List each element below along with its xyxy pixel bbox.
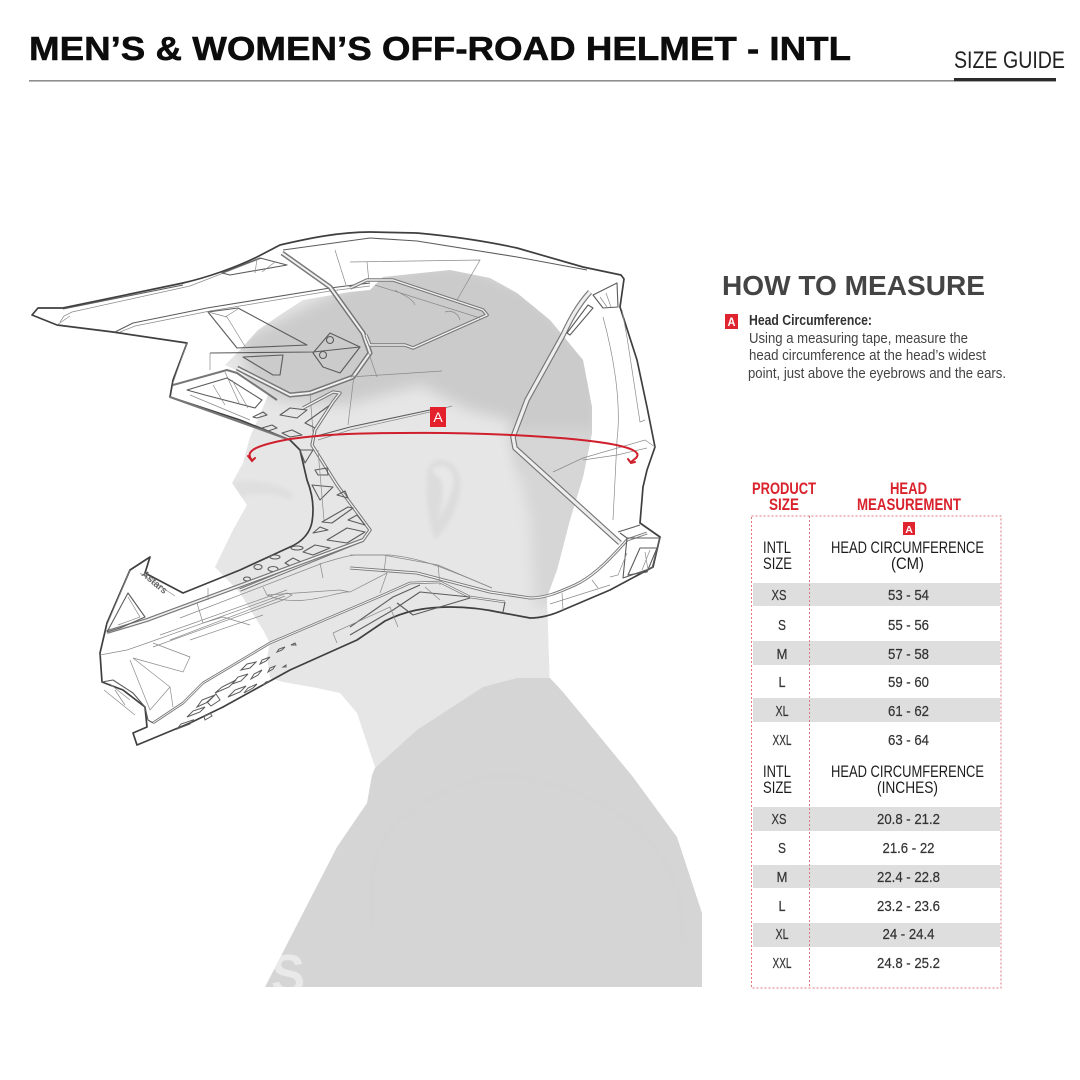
measuring instructions: Head Circumference:: [749, 313, 872, 329]
centimetre sizes: XXL: [772, 732, 792, 749]
centimetre sizes: S: [778, 617, 786, 634]
inches header: INTL: [763, 762, 791, 781]
helmet outer outline: [32, 232, 660, 745]
inch sizes: 20.8 - 21.2: [877, 811, 940, 828]
centimetre sizes: L: [778, 674, 786, 691]
chin vent holes: [177, 643, 296, 729]
table column headers: MEASUREMENT: [857, 495, 961, 514]
centimetre sizes: XS: [772, 587, 786, 604]
table row bands: [753, 583, 1000, 947]
inches header: (INCHES): [877, 778, 938, 797]
inch sizes: 24.8 - 25.2: [877, 955, 940, 972]
centimetre sizes: 55 - 56: [888, 617, 929, 634]
measuring instructions: head circumference at the head’s widest: [749, 348, 986, 364]
centimetre sizes: 53 - 54: [888, 587, 929, 604]
main spine: [237, 253, 370, 395]
helmet line drawing: [32, 232, 660, 745]
header rule: [29, 78, 1056, 82]
ear: [427, 460, 460, 540]
logo on chin: Astars: [139, 569, 169, 597]
rear details: [313, 283, 660, 610]
inches header: HEAD CIRCUMFERENCE: [831, 762, 984, 781]
centimetres header: SIZE: [763, 554, 792, 573]
inch sizes: 24 - 24.4: [882, 926, 934, 943]
rear arc band: [513, 292, 620, 543]
chin lower band: [102, 570, 505, 723]
title: MEN’S & WOMEN’S OFF-ROAD HELMET - INTL: [29, 30, 851, 67]
size table: [752, 479, 1001, 988]
measuring instructions: Using a measuring tape, measure the: [749, 331, 968, 347]
nose vent and lattice: [170, 370, 370, 590]
visor-side panels: [173, 308, 360, 432]
table column headers: SIZE: [769, 495, 799, 514]
inch sizes: L: [778, 898, 786, 915]
measuring instructions: point, just above the eyebrows and the ears.: [748, 366, 1006, 382]
centimetre sizes: 61 - 62: [888, 703, 929, 720]
marker A in table: [903, 522, 915, 536]
table column headers: PRODUCT: [752, 479, 816, 498]
chin strap band: [100, 533, 647, 710]
inch sizes: XL: [776, 926, 788, 943]
centimetre sizes: XL: [776, 703, 788, 720]
how to measure heading: HOW TO MEASURE: [722, 270, 985, 301]
inch sizes: [772, 811, 940, 972]
neck and face: [215, 270, 592, 790]
centimetre sizes: 63 - 64: [888, 732, 929, 749]
inch sizes: 21.6 - 22: [882, 840, 934, 857]
marker A on head: A: [433, 409, 443, 425]
jaw lattice holes: [244, 450, 365, 581]
inch sizes: M: [776, 869, 788, 886]
inch sizes: XXL: [772, 955, 792, 972]
centimetre sizes: [772, 587, 929, 749]
inches header: SIZE: [763, 778, 792, 797]
centimetres header: (CM): [891, 554, 924, 573]
centimetres header: HEAD CIRCUMFERENCE: [831, 538, 984, 557]
measuring tape arrow: [248, 433, 638, 463]
shirt: [265, 678, 702, 987]
centimetres header: [763, 538, 984, 573]
centimetres header: INTL: [763, 538, 791, 557]
inch sizes: 22.4 - 22.8: [877, 869, 940, 886]
hair and shading: [232, 262, 600, 610]
measuring instructions: A: [728, 315, 736, 329]
centimetre sizes: 59 - 60: [888, 674, 929, 691]
inch sizes: 23.2 - 23.6: [877, 898, 940, 915]
centimetre sizes: 57 - 58: [888, 646, 929, 663]
measuring instructions: [725, 313, 1006, 382]
side vent: [350, 280, 487, 377]
shirt sleeve seam: [371, 775, 683, 950]
marker A in table: A: [905, 524, 913, 536]
inch sizes: S: [778, 840, 786, 857]
inches header: [763, 762, 984, 797]
marker A on head: [430, 407, 446, 427]
centimetre sizes: M: [776, 646, 788, 663]
table column headers: [752, 479, 961, 514]
table dashed frame: [752, 516, 1001, 988]
inch sizes: XS: [772, 811, 786, 828]
table column headers: HEAD: [890, 479, 927, 498]
visor details: [57, 238, 587, 332]
shirt print: S: [271, 943, 305, 1005]
photo: man in profile silhouette: [215, 262, 702, 1005]
